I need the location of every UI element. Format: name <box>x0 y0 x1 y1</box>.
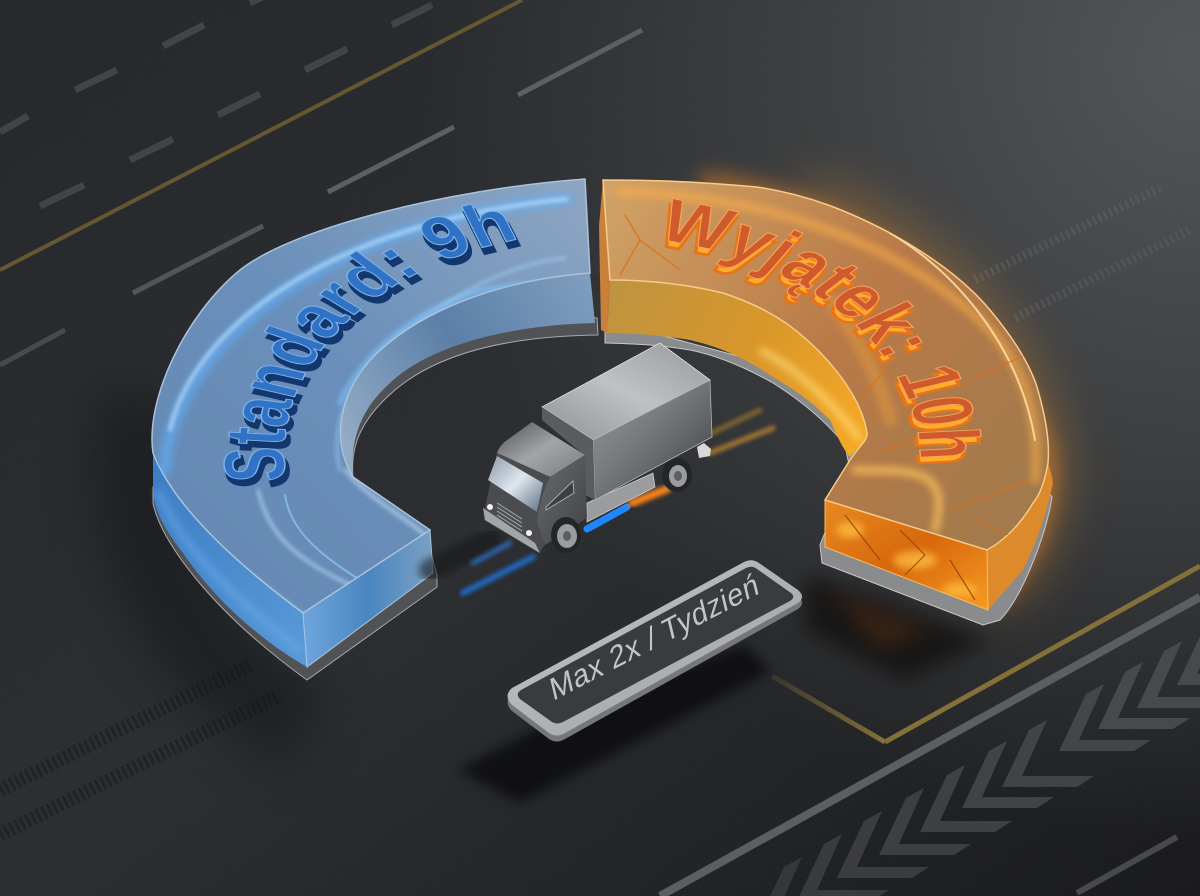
front face of orange arc <box>825 500 988 610</box>
truck rear wheel <box>662 458 692 492</box>
truck chassis <box>587 473 655 522</box>
heading: Standard: 9h: Standard: 9h <box>225 208 522 488</box>
heading: Standard: 9h: Standard: 9h <box>223 204 517 480</box>
heading: Wyjątek: 10h: Wyjątek: 10h <box>668 198 982 458</box>
metal base plate of blue arc <box>153 300 598 680</box>
grille <box>497 503 522 531</box>
road markings: lower right lines <box>660 566 1200 896</box>
flames in front face <box>836 515 978 600</box>
inner wall of orange arc <box>607 280 867 457</box>
road markings: upper left lane dashes <box>0 0 642 365</box>
bumper <box>483 508 540 553</box>
side window <box>546 481 574 510</box>
amber bright patches in inner wall <box>760 350 860 440</box>
callout label: Max 2x / Tydzień <box>547 566 762 708</box>
callout: Max 2x / Tydzień <box>508 560 802 742</box>
outer wall of blue arc <box>153 453 307 667</box>
panel: blue standard arc <box>151 178 598 680</box>
panel: orange exception arc <box>599 161 1091 626</box>
truck tail light <box>697 443 711 458</box>
truck front wheel <box>551 517 581 553</box>
tyre tracks <box>0 188 1190 835</box>
glowing veins and cracks in amber glass <box>620 192 1036 540</box>
icon: metal truck <box>483 343 712 553</box>
light trails under truck <box>430 410 773 593</box>
top face of orange arc <box>603 180 1048 550</box>
left edge of orange arc <box>599 180 610 333</box>
glowing edge streak on outer wall <box>158 490 300 650</box>
metal base plate of orange arc <box>605 320 1052 625</box>
heading: Wyjątek: 10h: Wyjątek: 10h <box>664 202 981 464</box>
inner wall of blue arc <box>341 273 595 477</box>
light streaks in blue glass <box>160 199 570 615</box>
road markings: chevrons <box>757 618 1200 896</box>
truck cargo box <box>542 343 712 500</box>
road marking: upper yellow line <box>0 0 522 270</box>
front face of blue arc <box>303 530 433 667</box>
windscreen <box>488 456 543 512</box>
top face of blue arc <box>152 179 590 613</box>
truck cab <box>483 422 587 553</box>
orange outer glow <box>700 182 1046 600</box>
outer wall of orange arc <box>987 463 1053 610</box>
